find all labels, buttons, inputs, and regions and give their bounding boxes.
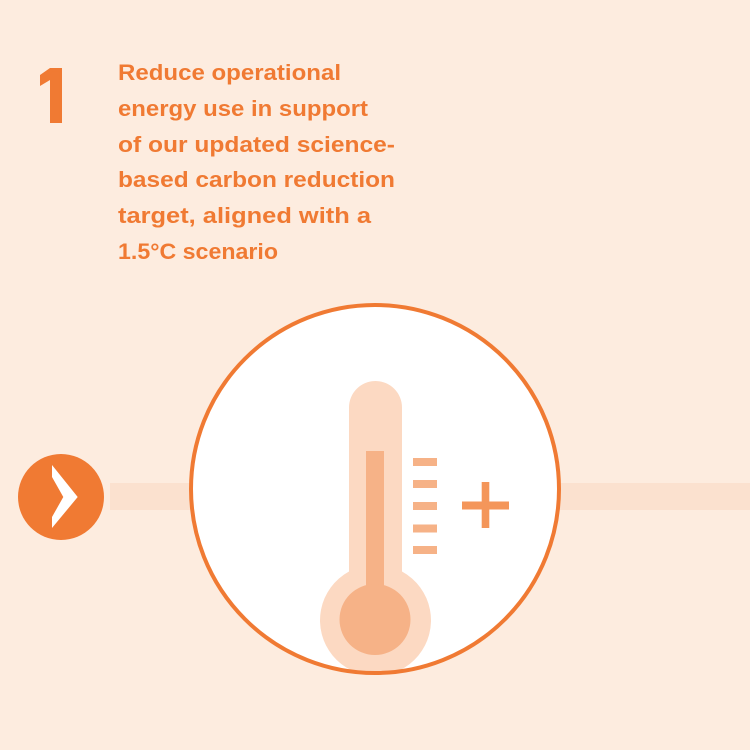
arrow button	[18, 454, 104, 540]
heading text: based carbon reduction	[118, 167, 395, 192]
icon circle	[191, 305, 559, 676]
heading text: of our updated science-	[118, 132, 395, 157]
heading text: Reduce operational	[118, 60, 341, 85]
thermometer scale ticks	[413, 458, 437, 554]
heading text: energy use in support	[118, 96, 369, 121]
heading text: 1.5°C scenario	[118, 239, 278, 264]
step number: 1	[32, 50, 79, 144]
connector band	[110, 483, 750, 510]
heading text: target, aligned with a	[118, 203, 372, 228]
icon: thermometer	[320, 381, 431, 676]
icon: plus sign	[462, 482, 509, 528]
heading text	[118, 60, 395, 264]
